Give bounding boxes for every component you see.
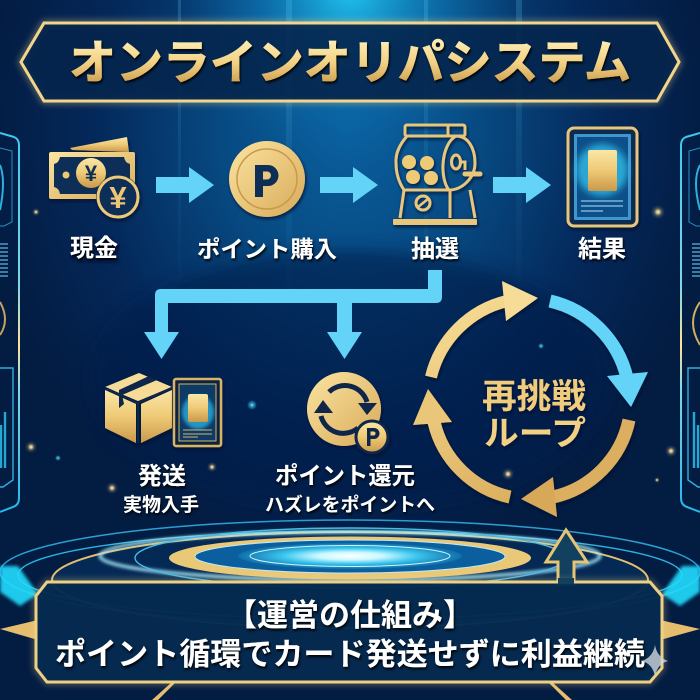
callout: how it runs [36,578,662,682]
label: shipping: 発送 [138,463,186,490]
step: point purchase [197,141,337,262]
step: draw [393,125,480,263]
title text: オンラインオリパシステム [69,36,631,89]
icon: gacha machine [393,125,480,225]
icon: P coin [229,141,305,217]
panel: left side hud [0,133,19,512]
label: point return: ポイント還元 [275,463,415,490]
platform: glowing rings [0,520,700,628]
arrow: cash to points [156,167,214,203]
arrow: draw to result [493,167,551,203]
label: misses to points: ハズレをポイントへ [265,493,435,516]
chart: retry loop [413,281,648,517]
label: retry: 再挑戦 [482,378,586,416]
icon: recycle coin [307,372,388,453]
label: real item: 実物入手 [123,494,199,516]
icon: small card [174,379,221,446]
label: point purchase: ポイント購入 [197,236,337,262]
arrow: loop top right [550,301,648,407]
icon: banknotes and yen coin: ¥ [109,180,127,215]
label: draw: 抽選 [411,236,459,263]
outcome: shipping [105,373,221,516]
label: loop: ループ [484,415,586,453]
callout frame [36,578,662,682]
label: cash: 現金 [70,235,118,262]
arrow: loop top left [431,281,538,377]
arrow: points to draw [320,167,378,203]
title banner [21,23,679,101]
outcome: point return [265,372,435,516]
arrow: up to platform [546,530,587,584]
callout body: ポイント循環でカード発送せずに利益継続 [55,637,645,672]
decorative side spikes [0,620,700,700]
icon: card [568,128,637,226]
icon: banknotes and yen coin [49,137,140,219]
icon: banknotes and yen coin: ¥ [85,161,98,186]
icon: sparkle [642,645,668,677]
arrow: loop bottom right [521,420,629,517]
label: result: 結果 [578,236,626,263]
step: result [568,128,637,263]
panel: right side hud [681,133,700,512]
arrow: loop bottom left [413,389,510,497]
step: cash [49,137,140,262]
banner frame [21,23,679,101]
callout heading: 【運営の仕組み】 [226,598,474,633]
icon: parcel box [105,373,172,443]
arrow: branch from draw to shipping and points [144,270,442,359]
